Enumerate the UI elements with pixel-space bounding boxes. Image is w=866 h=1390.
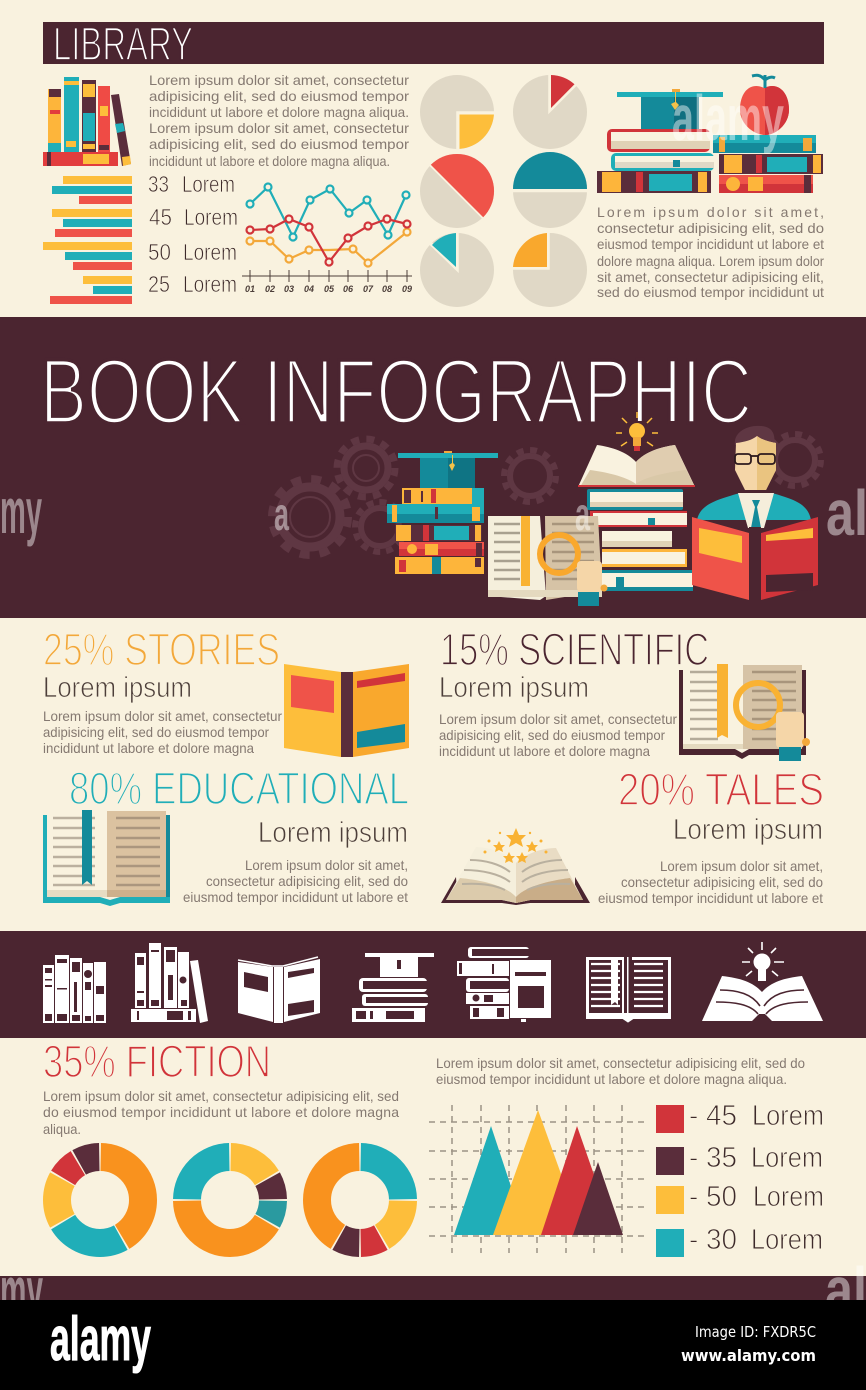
- stat: 20% tales: 20% TALES: [618, 764, 824, 815]
- text block: Lorem ipsum dolor sit amet, consectetur: [43, 708, 282, 724]
- icon: middle book stack with open book and bulb: [578, 412, 695, 591]
- icon: books white: [43, 955, 106, 1023]
- stat: 25% stories: [43, 624, 409, 757]
- triangle chart: [429, 1105, 645, 1253]
- stat: 15% scientific: 15% SCIENTIFIC: [440, 624, 709, 675]
- icon: left book stack with cap: [387, 451, 498, 574]
- icon: open book with teal cover: [43, 810, 170, 906]
- text block: library intro: adipisicing elit, sed do eiusmod tempor: [149, 88, 409, 104]
- text block: chart intro: [436, 1055, 805, 1087]
- icon: closed book: [284, 664, 409, 757]
- icon: open book with magnifier: [488, 516, 608, 606]
- icon: book with magnifier: [679, 664, 810, 761]
- donut 3: [317, 1157, 403, 1243]
- text block: library right: consectetur adipisicing elit, sed do: [597, 220, 824, 236]
- icon: man reading a book: [692, 426, 818, 601]
- hero band: [0, 317, 866, 618]
- stat: 35% fiction: 35% FICTION: [43, 1036, 271, 1087]
- library heading bar: [43, 17, 824, 70]
- legend: Lorem: [751, 1142, 823, 1174]
- legend: - 45: [689, 1100, 737, 1132]
- logo: alamy: [50, 1305, 151, 1374]
- footer band: [0, 1276, 866, 1300]
- icon: book stack white: [457, 947, 551, 1022]
- legend: Lorem: [752, 1100, 824, 1132]
- text block: library intro: adipisicing elit, sed do eiusmod tempor: [149, 136, 409, 152]
- legend: Lorem: [751, 1224, 823, 1256]
- stat: 35% fiction: [43, 1036, 399, 1137]
- stat: 20% tales: [441, 764, 824, 906]
- line chart: 04: [304, 284, 314, 294]
- text block: library right: eiusmod tempor incididunt ut labore et: [597, 236, 824, 252]
- background gears: [272, 434, 821, 555]
- stat: 25% stories: 25% STORIES: [43, 624, 280, 675]
- line chart: 03: [284, 284, 294, 294]
- icon: shelf white: [131, 943, 208, 1023]
- watermarks: a: [274, 488, 289, 540]
- subheading: Lorem ipsum: [673, 814, 823, 846]
- watermarks: alamy: [672, 82, 784, 154]
- donut 2: [187, 1157, 273, 1243]
- subheading: Lorem ipsum: [258, 817, 408, 849]
- line chart: [242, 184, 412, 294]
- text block: chart intro: eiusmod tempor incididunt ut labore et dolore magna aliqua.: [436, 1071, 787, 1087]
- text block: consectetur adipisicing elit, sed do: [206, 873, 408, 889]
- number labels: 33: [148, 171, 169, 197]
- text block: do eiusmod tempor incididunt ut labore et dolore magna: [43, 1104, 399, 1120]
- text block: [183, 857, 408, 905]
- icon: open book white: [586, 957, 671, 1022]
- line chart: 08: [382, 284, 392, 294]
- icon: open book with stars: [441, 828, 590, 905]
- number labels: 45: [149, 204, 172, 230]
- text block: incididunt ut labore et dolore magna: [43, 740, 254, 756]
- text block: [439, 711, 677, 759]
- legend: - 35: [689, 1142, 737, 1174]
- donut charts: [57, 1157, 403, 1243]
- watermarks: my: [0, 475, 42, 547]
- text block: eiusmod tempor incididunt ut labore et: [183, 889, 408, 905]
- library section: [43, 17, 824, 307]
- bar chart: horizontal bars: [43, 176, 132, 304]
- text block: [598, 858, 823, 906]
- number labels: [148, 171, 238, 297]
- image id: Image ID: FXDR5C: [695, 1323, 816, 1341]
- pie charts: [420, 74, 588, 307]
- legend: - 50: [689, 1181, 737, 1213]
- text block: eiusmod tempor incididunt ut labore et: [598, 890, 823, 906]
- number labels: 50: [148, 239, 171, 265]
- text block: consectetur adipisicing elit, sed do: [621, 874, 823, 890]
- icon: closed book white: [238, 957, 320, 1023]
- legend: Lorem: [753, 1181, 824, 1213]
- number labels: 25: [148, 271, 170, 297]
- icon: cap and books white: [352, 953, 434, 1022]
- website: www.alamy.com: [681, 1346, 816, 1365]
- watermarks: a: [575, 488, 590, 540]
- line chart: 06: [343, 284, 354, 294]
- line chart: 09: [402, 284, 412, 294]
- text block: [43, 1088, 399, 1137]
- text block: Lorem ipsum dolor sit amet,: [660, 858, 823, 874]
- watermarks: my: [0, 1254, 43, 1326]
- text block: library right: dolore magna aliqua. Lorem ipsum dolor: [597, 253, 824, 269]
- text block: library intro: [149, 72, 409, 169]
- line chart: 02: [265, 284, 275, 294]
- icon: books, cap and apple: [597, 75, 823, 193]
- text block: library right: [597, 204, 824, 300]
- line chart: 01: [245, 284, 255, 294]
- text block: adipisicing elit, sed do eiusmod tempor: [43, 724, 269, 740]
- icon: books on shelf: [43, 77, 131, 166]
- subheading: Lorem ipsum: [43, 672, 192, 704]
- text block: chart intro: Lorem ipsum dolor sit amet, consectetur adipisicing elit, sed do: [436, 1055, 805, 1071]
- stat: 80% educational: 80% EDUCATIONAL: [69, 763, 409, 814]
- stat: 80% educational: [43, 763, 409, 906]
- text block: [43, 708, 282, 756]
- text block: library right: Lorem ipsum dolor sit amet,: [597, 204, 824, 220]
- donut 1: [57, 1157, 143, 1243]
- number labels: Lorem: [182, 171, 235, 197]
- text block: library intro: incididunt ut labore et dolore magna aliqua.: [149, 104, 409, 120]
- stat: 15% scientific: [439, 624, 810, 761]
- number labels: Lorem: [184, 204, 238, 230]
- text block: Lorem ipsum dolor sit amet, consectetur: [439, 711, 677, 727]
- icon band: [0, 931, 866, 1038]
- text block: library intro: Lorem ipsum dolor sit amet, consectetur: [149, 72, 409, 88]
- text block: aliqua.: [43, 1121, 81, 1137]
- number labels: Lorem: [183, 239, 237, 265]
- text block: library intro: incididunt ut labore et dolore magna aliqua.: [149, 153, 390, 169]
- subheading: Lorem ipsum: [439, 672, 589, 704]
- icon: open book with bulb white: [702, 942, 823, 1021]
- legend: - 30: [689, 1224, 737, 1256]
- line chart: 05: [324, 284, 335, 294]
- text block: library right: sed do eiusmod tempor incididunt ut: [597, 284, 824, 300]
- text block: Lorem ipsum dolor sit amet, consectetur adipisicing elit, sed: [43, 1088, 399, 1104]
- number labels: Lorem: [183, 271, 237, 297]
- legend: [656, 1100, 824, 1257]
- text block: incididunt ut labore et dolore magna: [439, 743, 650, 759]
- library heading bar: LIBRARY: [53, 17, 193, 70]
- black footer: [0, 1300, 866, 1390]
- line chart: 07: [363, 284, 374, 294]
- text block: adipisicing elit, sed do eiusmod tempor: [439, 727, 665, 743]
- text block: Lorem ipsum dolor sit amet,: [245, 857, 408, 873]
- text block: library right: sit amet, consectetur adipisicing elit,: [597, 269, 824, 285]
- text block: library intro: Lorem ipsum dolor sit amet, consectetur: [149, 120, 409, 136]
